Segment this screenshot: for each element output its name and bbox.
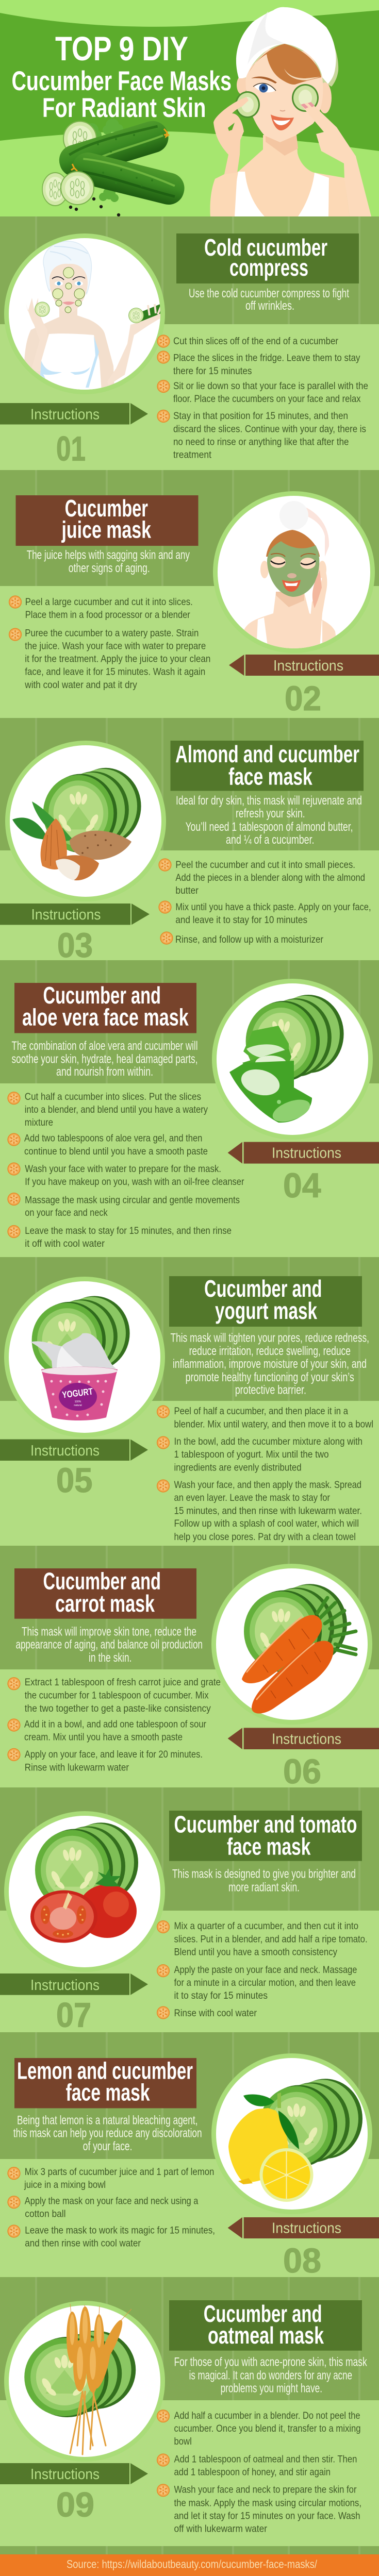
instructions tag: Instructions xyxy=(30,1443,100,1459)
step 2 xyxy=(157,1436,362,1473)
footer: source xyxy=(0,2554,379,2576)
step 2: the juice. Wash your face with water to prepare xyxy=(25,641,206,652)
step 2: Add two tablespoons of aloe vera gel, and then xyxy=(24,1133,202,1144)
description xyxy=(27,548,190,575)
heading xyxy=(169,1811,362,1861)
description: and nourish from within. xyxy=(56,1065,153,1079)
step 4: on your face and neck xyxy=(25,1207,108,1218)
step 3 xyxy=(157,2484,361,2534)
steps xyxy=(157,2410,361,2534)
number: 02 xyxy=(285,679,321,718)
step 1 xyxy=(7,1091,208,1128)
heading: Cucumber and xyxy=(204,1275,322,1302)
description: The combination of aloe vera and cucumber will xyxy=(11,1039,198,1053)
description: refresh your skin. xyxy=(236,807,305,821)
footer: source: Source: https://wildaboutbeauty.com/cucumber-face-masks/ xyxy=(67,2558,318,2571)
panel: section 1 cold cucumber compress xyxy=(0,233,368,468)
step 3 xyxy=(157,1479,362,1543)
step 2: there for 15 minutes xyxy=(173,365,252,377)
heading: carrot mask xyxy=(55,1590,155,1617)
step 3: Rinse, and follow up with a moisturizer xyxy=(175,934,323,945)
step 3: Leave the mask to work its magic for 15 minutes, xyxy=(25,2224,215,2236)
description: more radiant skin. xyxy=(228,1881,300,1895)
description: of your face. xyxy=(83,2139,132,2153)
step 3: Rinse with cool water xyxy=(174,2008,257,2019)
step 2: Puree the cucumber to a watery paste. Strain xyxy=(25,628,199,639)
illustration: cucumbers xyxy=(42,117,188,216)
heading: Cucumber xyxy=(65,495,148,522)
description xyxy=(176,794,362,847)
panel: section 8 lemon and cucumber face mask xyxy=(7,2053,379,2280)
step 1: Mix 3 parts of cucumber juice and 1 part of lemon xyxy=(25,2166,214,2178)
number: 07 xyxy=(56,1996,91,2035)
heading: Cold cucumber xyxy=(204,234,327,261)
step 5: it off with cool water xyxy=(25,1238,105,1249)
step 1 xyxy=(157,1920,368,1958)
step 1: the two together to get a paste-like consistency xyxy=(25,1703,211,1714)
step 3 xyxy=(7,2224,215,2249)
step 1: Place them in a food processor or a blender xyxy=(25,609,190,621)
description: appearance of aging, and balance oil production xyxy=(15,1638,203,1651)
step 3 xyxy=(157,2006,257,2019)
step 2: with cool water and pat it dry xyxy=(24,679,137,691)
step 2 xyxy=(7,1718,206,1743)
step 3: Wash your face with water to prepare for the mask. xyxy=(25,1163,221,1175)
step 1 xyxy=(7,1677,221,1714)
heading: compress xyxy=(229,254,308,281)
description: The juice helps with sagging skin and any xyxy=(27,548,190,562)
step 1 xyxy=(7,2166,214,2190)
description xyxy=(172,1867,356,1895)
step 2 xyxy=(157,1964,357,2001)
step 1: juice in a mixing bowl xyxy=(24,2179,106,2190)
step 3: an even layer. Leave the mask to stay for xyxy=(174,1492,330,1503)
instructions tag xyxy=(228,1728,379,1749)
heading: face mask xyxy=(228,763,312,790)
step 1 xyxy=(157,1405,373,1430)
description: in the skin. xyxy=(89,1651,132,1665)
step 1: Blend until you have a smooth consistency xyxy=(174,1947,337,1958)
panel: section 3 almond and cucumber face mask xyxy=(0,741,371,965)
title xyxy=(11,29,232,123)
step 1 xyxy=(157,2410,361,2447)
step 1: butter xyxy=(175,885,199,896)
steps xyxy=(7,2166,215,2249)
illustration: cucumber slices and tomatoes xyxy=(4,1811,165,1972)
illustration: cucumber slices and yogurt cup xyxy=(4,1277,165,1437)
step 1: Cut half a cucumber into slices. Put the slices xyxy=(25,1091,201,1102)
illustration: cucumber slices and aloe vera xyxy=(212,979,373,1140)
step 5: Leave the mask to stay for 15 minutes, and then rinse xyxy=(25,1225,232,1236)
panel: section 5 cucumber and yogurt mask xyxy=(0,1275,373,1543)
panel: section 2 cucumber juice mask xyxy=(9,491,379,718)
steps xyxy=(157,1920,368,2019)
number: 09 xyxy=(56,2486,94,2524)
step 2: add 1 tablespoon of honey, and stir again xyxy=(174,2467,331,2478)
heading xyxy=(170,741,364,791)
heading xyxy=(176,233,359,283)
panel: header xyxy=(0,0,379,216)
description xyxy=(170,1331,369,1397)
panel: section 4 cucumber and aloe vera face mask xyxy=(7,979,379,1249)
step 2: cotton ball xyxy=(25,2209,65,2220)
illustration: cucumber slices and carrots xyxy=(211,1564,372,1725)
illustration: cucumber slices and yogurt cup: natural xyxy=(74,1404,82,1407)
step 2: cream. Mix until you have a smooth paste xyxy=(24,1732,183,1743)
description: soothe your skin, hydrate, heal damaged parts, xyxy=(11,1052,198,1066)
illustration: cucumber slices and almonds xyxy=(5,741,166,901)
step 1: bowl xyxy=(174,2436,192,2447)
step 3: and then rinse with cool water xyxy=(25,2238,141,2249)
description: other signs of aging. xyxy=(69,561,150,575)
heading: aloe vera face mask xyxy=(22,1004,189,1031)
step 4 xyxy=(157,410,366,460)
illustration: cucumber slices and yogurt cup: YOGURT xyxy=(61,1386,93,1400)
heading xyxy=(169,1275,362,1327)
step 1 xyxy=(158,858,365,896)
step 1: Peel the cucumber and cut it into small pieces. xyxy=(175,859,355,871)
step 2 xyxy=(158,900,371,926)
description xyxy=(174,2355,367,2396)
step 1: Extract 1 tablespoon of fresh carrot juice and grate xyxy=(25,1677,221,1688)
heading: Lemon and cucumber xyxy=(17,2058,193,2084)
heading xyxy=(14,1567,196,1619)
step 3: If you have makeup on you, wash with an oil-free cleanser xyxy=(25,1176,244,1187)
step 2: 1 tablespoon of yogurt. Mix until the two xyxy=(174,1449,329,1460)
step 1: into a blender, and blend until you have a watery xyxy=(25,1104,208,1115)
step 1: Cut thin slices off of the end of a cucumber xyxy=(173,336,338,347)
steps xyxy=(157,1405,373,1543)
heading: yogurt mask xyxy=(215,1297,317,1324)
step 5 xyxy=(7,1225,232,1249)
step 2: ingredients are evenly distributed xyxy=(174,1462,302,1473)
step 2: it for the treatment. Apply the juice to your clean xyxy=(25,654,210,665)
step 3: Apply on your face, and leave it for 20 minutes. xyxy=(25,1749,203,1760)
description: off wrinkles. xyxy=(245,299,294,313)
step 1: Peel of half a cucumber, and then place it in a xyxy=(174,1406,348,1417)
instructions tag: Instructions xyxy=(272,2220,341,2237)
step 2 xyxy=(7,1133,208,1157)
instructions tag xyxy=(0,904,150,925)
title: TOP 9 DIY xyxy=(55,29,188,68)
steps xyxy=(7,1677,221,1773)
number: 08 xyxy=(283,2242,321,2280)
step 1: the cucumber for 1 tablespoon of cucumber. Mix xyxy=(25,1690,209,1701)
description xyxy=(189,287,349,313)
illustration: cucumber slices and lemon xyxy=(211,2053,372,2214)
instructions tag: Instructions xyxy=(30,1977,100,1994)
number: 01 xyxy=(56,430,86,468)
heading xyxy=(14,982,196,1033)
step 2: Add it in a bowl, and add one tablespoon of sour xyxy=(24,1718,206,1730)
instructions tag xyxy=(228,2217,379,2238)
step 3: Rinse with lukewarm water xyxy=(25,1762,129,1773)
number: 04 xyxy=(283,1166,321,1205)
description xyxy=(11,1039,198,1079)
description: Being that lemon is a natural bleaching agent, xyxy=(17,2113,198,2127)
instructions tag xyxy=(0,1439,148,1461)
heading: face mask xyxy=(66,2079,150,2106)
description: problems you might have. xyxy=(221,2382,322,2396)
step 2 xyxy=(7,2196,199,2220)
steps xyxy=(9,595,210,691)
heading: Cucumber and xyxy=(43,982,161,1009)
heading: Cucumber and xyxy=(204,2300,322,2327)
instructions tag xyxy=(229,655,379,676)
heading: face mask xyxy=(227,1833,311,1860)
title: Cucumber Face Masks xyxy=(11,66,232,96)
instructions tag: Instructions xyxy=(31,907,101,923)
step 3 xyxy=(160,931,323,945)
step 2 xyxy=(157,350,360,377)
illustration: woman with green mask xyxy=(213,491,375,653)
step 2 xyxy=(9,628,210,691)
step 1: Peel a large cucumber and cut it into slices. xyxy=(25,596,193,608)
instructions tag: Instructions xyxy=(272,1731,341,1747)
step 2: it to stay for 15 minutes xyxy=(174,1990,268,2001)
heading xyxy=(15,495,198,546)
description: protective barrier. xyxy=(235,1383,306,1397)
step 3 xyxy=(7,1162,244,1187)
instructions tag: Instructions xyxy=(272,1145,341,1162)
heading: oatmeal mask xyxy=(208,2322,324,2349)
instructions tag xyxy=(228,1142,379,1164)
panel: section 7 cucumber and tomato face mask xyxy=(0,1811,368,2035)
description: This mask will improve skin tone, reduce the xyxy=(22,1625,196,1638)
illustration: woman with cucumber slices xyxy=(210,7,371,216)
heading xyxy=(169,2300,362,2351)
step 4: no need to rinse or anything like that after the xyxy=(173,436,349,447)
illustration: cucumber slices and yogurt cup: 100% xyxy=(75,1400,81,1403)
step 2: continue to blend until you have a smooth paste xyxy=(24,1146,208,1157)
instructions tag xyxy=(0,2463,148,2484)
step 2: Apply the mask on your face and neck using a xyxy=(25,2196,199,2207)
number: 03 xyxy=(57,926,93,965)
title: For Radiant Skin xyxy=(42,93,206,123)
instructions tag: Instructions xyxy=(273,658,343,674)
number: 05 xyxy=(56,1461,93,1500)
step 1: mixture xyxy=(25,1117,53,1128)
instructions tag xyxy=(0,403,148,425)
instructions tag: Instructions xyxy=(30,2466,100,2483)
panel: section 6 cucumber and carrot mask xyxy=(7,1564,379,1791)
instructions tag: Instructions xyxy=(30,407,100,423)
description: this mask can help you reduce any discoloration xyxy=(13,2127,202,2140)
step 2: face, and leave it for 15 minutes. Wash it again xyxy=(25,666,205,677)
step 3: Follow up with a splash of cool water, which will xyxy=(174,1518,359,1529)
number: 06 xyxy=(283,1752,321,1791)
steps xyxy=(158,858,371,945)
step 4: Massage the mask using circular and gentle movements xyxy=(25,1194,240,1206)
steps xyxy=(7,1091,244,1249)
illustration: woman with cucumber slices on face xyxy=(4,233,167,394)
instructions tag xyxy=(0,1973,148,1995)
step 3 xyxy=(157,380,368,405)
description xyxy=(15,1625,203,1665)
heading: Cucumber and xyxy=(43,1567,161,1594)
steps xyxy=(157,334,368,460)
step 1 xyxy=(9,595,193,621)
panel: section 9 cucumber and oatmeal mask xyxy=(0,2300,367,2534)
step 4 xyxy=(7,1193,240,1218)
description xyxy=(13,2113,202,2153)
description: and ¼ of a cucumber. xyxy=(226,833,315,847)
step 2 xyxy=(157,2453,357,2478)
heading xyxy=(14,2058,196,2108)
step 4: treatment xyxy=(173,449,212,460)
heading: juice mask xyxy=(61,516,151,543)
step 4: Stay in that position for 15 minutes, and then xyxy=(173,410,348,422)
illustration: cucumber slices and wheat xyxy=(4,2301,165,2462)
step 3 xyxy=(7,1748,203,1773)
step 3: off with lukewarm water xyxy=(174,2523,267,2534)
step 2: and leave it to stay for 10 minutes xyxy=(175,914,307,926)
